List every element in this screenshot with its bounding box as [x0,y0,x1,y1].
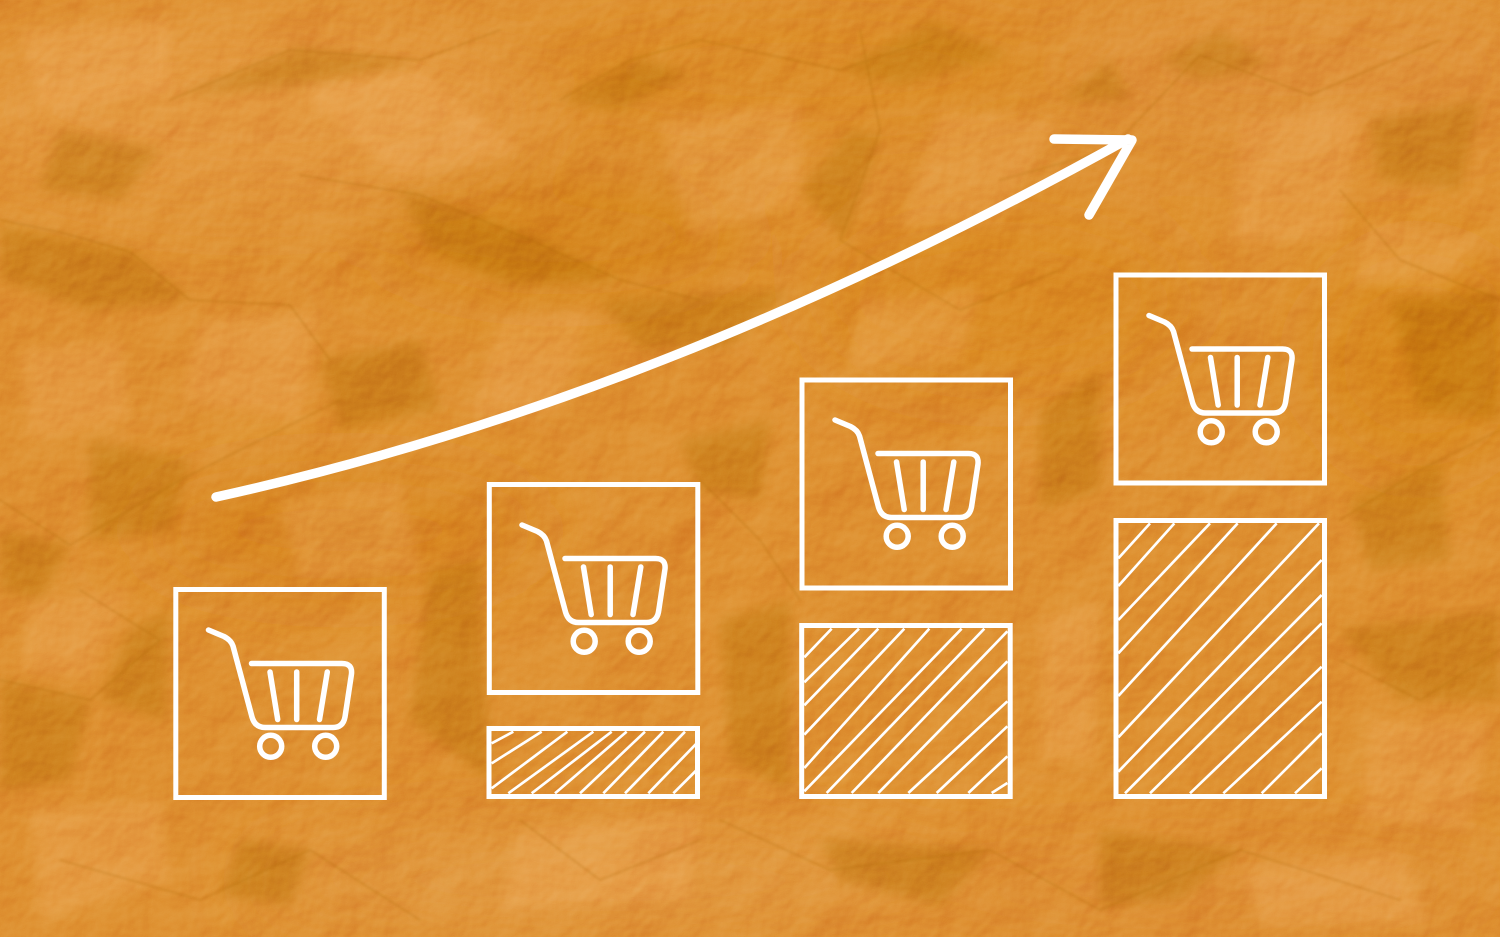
column 2 [489,484,698,796]
arrow shaft [216,139,1128,497]
hatched bar 3 [802,626,1010,796]
arrow head [1054,139,1132,215]
icon: shopping cart 1 [208,630,352,757]
cart box 1 [176,590,384,798]
column 4 [1116,275,1324,796]
icon: shopping cart 2 [522,525,665,652]
column 3 [802,380,1010,796]
cart box 4 [1116,275,1324,483]
cart box 2 [489,484,698,692]
hatched bar 4 [1116,520,1324,796]
cart box 3 [802,380,1010,588]
icon: shopping cart 4 [1149,316,1292,443]
hatched bar 2 [489,728,698,796]
growth arrow [216,139,1132,497]
column 1 [176,590,384,798]
icon: shopping cart 3 [835,420,978,547]
